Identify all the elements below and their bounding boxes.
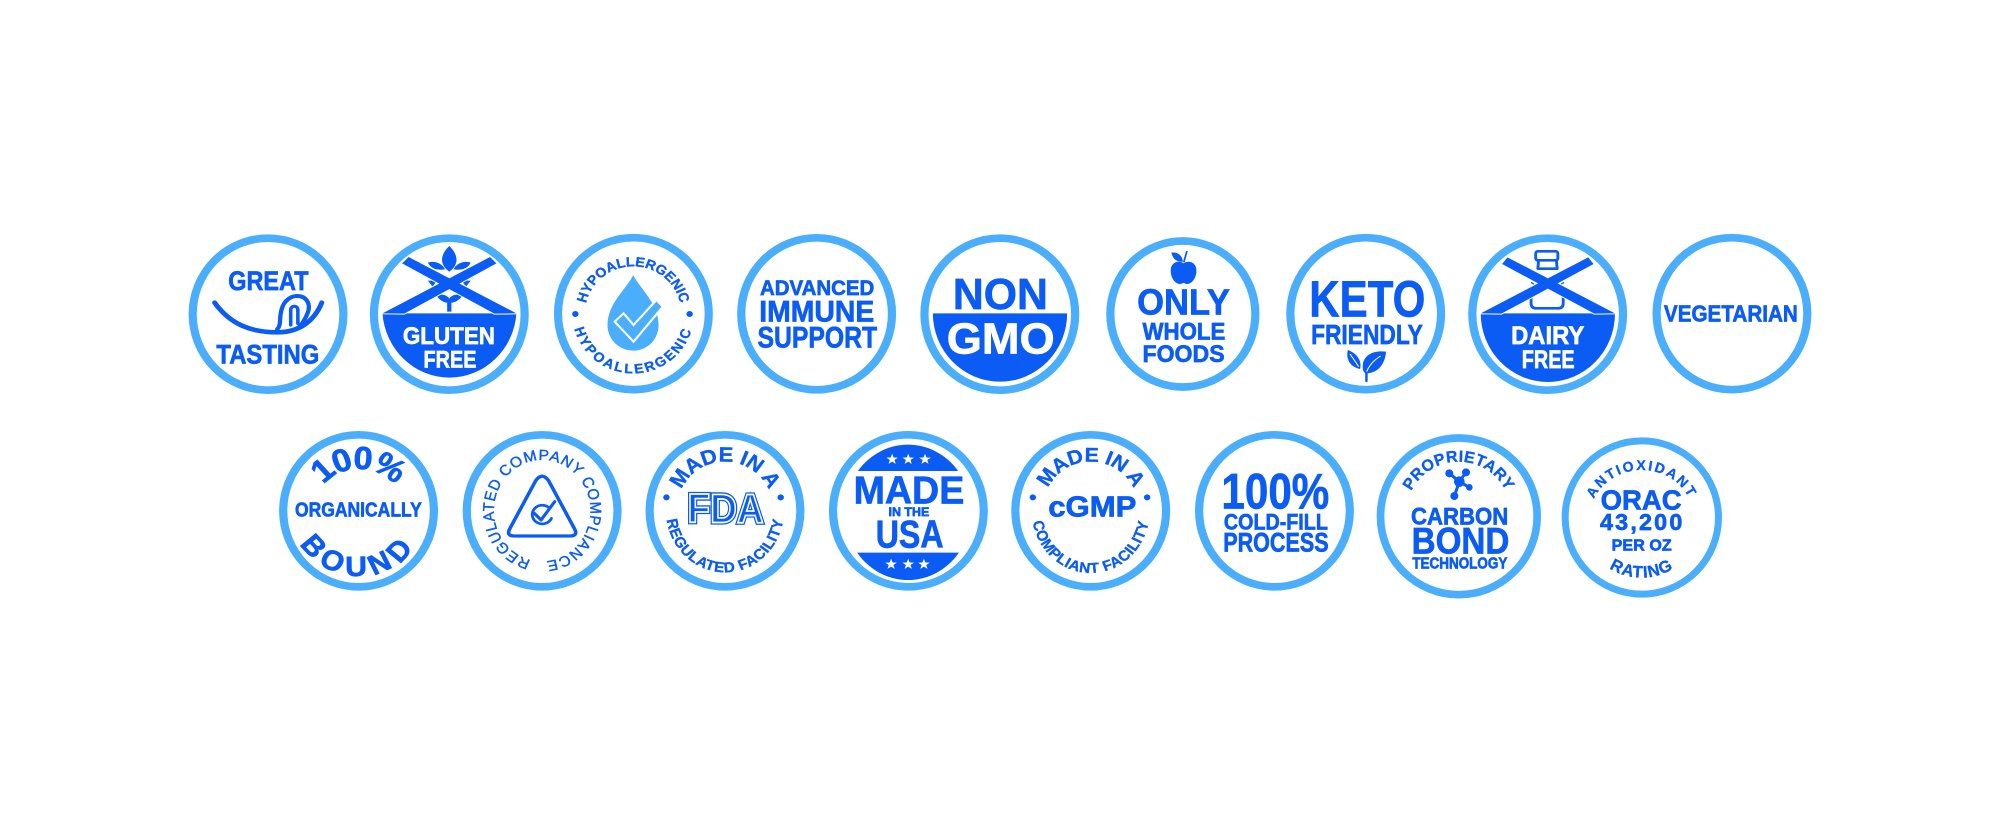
label: dairy: DAIRY	[1511, 321, 1585, 350]
ring	[1657, 238, 1807, 390]
ring	[833, 435, 984, 587]
text: process: PROCESS	[1223, 527, 1329, 557]
ring	[741, 238, 892, 390]
text: orac: ORAC	[1601, 484, 1682, 515]
ring	[1290, 238, 1441, 390]
ring	[1472, 238, 1623, 390]
text: in the: IN THE	[889, 505, 929, 519]
curved text: 100%: 100%	[312, 446, 406, 484]
ring	[1015, 435, 1166, 587]
half disc	[1481, 313, 1615, 382]
text: support: SUPPORT	[757, 320, 877, 354]
icon: smile with tongue	[215, 296, 322, 332]
badge: vegetarian	[1657, 238, 1807, 390]
ring	[374, 238, 525, 390]
curved text bottom: COMPLIANT FACILITY	[1033, 520, 1148, 574]
badge: made in a cgmp compliant facility	[1011, 431, 1170, 591]
ring	[283, 435, 434, 587]
text: cgmp: cGMP	[1048, 492, 1136, 523]
ring	[1565, 441, 1718, 594]
text: per oz: PER OZ	[1612, 538, 1672, 555]
separator dots	[663, 494, 784, 500]
badge: gluten free	[374, 238, 525, 390]
text: 100%: 100%	[1221, 463, 1329, 519]
half disc	[933, 313, 1067, 382]
text: bond: BOND	[1412, 520, 1509, 561]
curved text bottom: RATING	[1610, 558, 1672, 578]
ring	[650, 435, 800, 587]
separator dots	[572, 311, 693, 317]
icon: water drop with check	[607, 275, 663, 351]
badge: made in a fda regulated facility	[646, 431, 804, 591]
curved text bottom: REGULATED FACILITY	[666, 518, 783, 573]
icon: molecule	[1445, 468, 1473, 500]
text: cold-fill: COLD-FILL	[1224, 509, 1328, 534]
text: foods: FOODS	[1142, 341, 1225, 368]
text: immune: IMMUNE	[759, 295, 874, 328]
text: organically: ORGANICALLY	[295, 499, 422, 521]
ring	[193, 238, 343, 390]
crossed bars	[382, 257, 516, 314]
ring	[558, 238, 709, 390]
curved text top: MADE IN A	[1036, 448, 1144, 488]
curved text: REGULATED COMPANY COMPLIANCE	[482, 450, 602, 572]
icon: triangle with check	[509, 476, 576, 536]
text: 43,200: 43,200	[1600, 509, 1682, 535]
ring	[1110, 241, 1255, 387]
heading: great: GREAT	[228, 266, 309, 296]
curved text: PROPRIETARY	[1402, 450, 1516, 490]
badge: advanced immune support	[741, 238, 892, 390]
label: free: FREE	[1522, 345, 1575, 374]
badge: made in the usa	[833, 435, 984, 587]
text: technology: TECHNOLOGY	[1412, 555, 1507, 572]
logo: fda: FDA	[687, 486, 764, 531]
text: non: NON	[953, 269, 1048, 319]
badge: proprietary carbon bond technology	[1376, 434, 1541, 598]
label: free: FREE	[424, 346, 476, 373]
icon: wheat	[428, 246, 471, 312]
badge: antioxidant orac	[1562, 437, 1722, 598]
badge: non gmo	[924, 238, 1075, 390]
curved text: bound: BOUND	[300, 532, 410, 577]
badge: keto friendly	[1290, 238, 1441, 390]
badge: hypoallergenic	[554, 234, 713, 394]
ring	[924, 238, 1075, 390]
crossed bars	[1481, 257, 1615, 314]
badge: only whole foods	[1110, 241, 1255, 387]
ring	[467, 435, 617, 587]
bottom banner with stars	[857, 553, 959, 580]
label: gluten: GLUTEN	[403, 323, 495, 350]
text: vegetarian: VEGETARIAN	[1664, 301, 1798, 327]
text: friendly: FRIENDLY	[1311, 320, 1423, 351]
text: gmo: GMO	[947, 314, 1055, 363]
icon: bottle	[1531, 251, 1564, 308]
top banner with stars	[858, 445, 958, 471]
ring	[1380, 438, 1537, 595]
text: whole: WHOLE	[1142, 318, 1225, 345]
text: keto: KETO	[1309, 271, 1425, 328]
badge: regulated company compliance	[462, 431, 622, 591]
badge: dairy free	[1472, 238, 1623, 390]
icon: leaves	[1347, 350, 1386, 381]
heading: tasting: TASTING	[216, 339, 319, 369]
badge: 100% organically bound	[279, 431, 438, 591]
logo: fda: FDA	[687, 486, 764, 531]
text: only: ONLY	[1137, 282, 1230, 322]
curved text bottom: HYPOALLERGENIC	[574, 326, 691, 374]
text: advanced: ADVANCED	[760, 276, 874, 300]
half disc	[382, 313, 516, 378]
text: usa: USA	[876, 512, 944, 556]
icon: apple	[1171, 252, 1196, 284]
separator dots	[1030, 494, 1150, 500]
curved text top: HYPOALLERGENIC	[576, 257, 689, 303]
badge: 100% cold-fill process	[1199, 435, 1350, 587]
curved text top: ANTIOXIDANT	[1587, 460, 1697, 499]
text: carbon: CARBON	[1411, 504, 1508, 531]
ring	[1199, 435, 1350, 587]
curved text top: MADE IN A	[668, 447, 780, 490]
text: made: MADE	[854, 468, 964, 512]
badge: great tasting	[193, 238, 343, 390]
